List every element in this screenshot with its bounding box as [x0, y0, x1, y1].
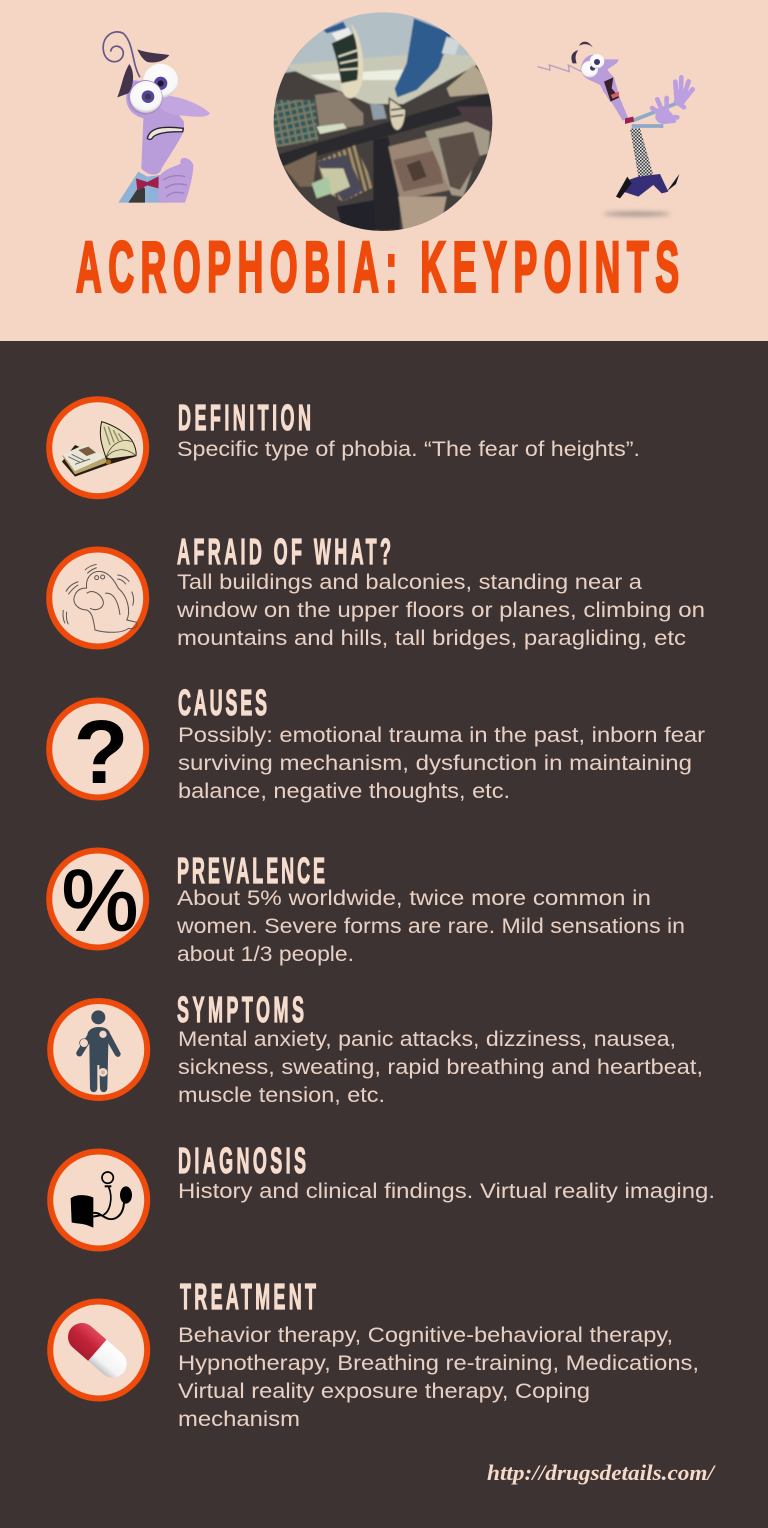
heading: afraid of what: AFRAID OF WHAT? — [177, 532, 391, 573]
icon: capsule pill — [50, 1302, 147, 1398]
icon: open book — [49, 399, 146, 496]
text: symptoms: Mental anxiety, panic attacks, dizziness, nausea, — [178, 1028, 676, 1051]
text: causes: balance, negative thoughts, etc. — [178, 780, 510, 803]
text: symptoms: sickness, sweating, rapid breathing and heartbeat, — [178, 1056, 703, 1079]
text: treatment: Hypnotherapy, Breathing re-training, Medications, — [178, 1352, 699, 1375]
title: ACROPHOBIA: KEYPOINTS — [76, 227, 679, 307]
illustration: fleeing purple character — [537, 42, 693, 216]
photo: looking down from a skyscraper ledge — [270, 7, 497, 237]
heading: symptoms: SYMPTOMS — [177, 990, 304, 1031]
heading: definition: DEFINITION — [178, 398, 311, 439]
text: afraid of what: window on the upper floors or planes, climbing on — [176, 599, 705, 622]
text: treatment: mechanism — [178, 1408, 300, 1431]
section: causes — [49, 683, 705, 803]
section: afraid of what — [49, 532, 705, 650]
icon: question mark — [49, 700, 146, 803]
text: causes: Possibly: emotional trauma in the past, inborn fear — [178, 724, 705, 747]
text: prevalence — [176, 887, 685, 966]
section: diagnosis — [50, 1141, 715, 1248]
icon: question mark: ? — [74, 703, 128, 803]
text: afraid of what: Tall buildings and balconies, standing near a — [177, 571, 642, 594]
text: treatment — [178, 1324, 699, 1431]
panel: header — [0, 0, 768, 341]
heading: treatment: TREATMENT — [180, 1277, 316, 1318]
text: diagnosis: History and clinical findings. Virtual reality imaging. — [178, 1180, 715, 1203]
text: treatment: Virtual reality exposure therapy, Coping — [178, 1380, 590, 1403]
text: treatment: Behavior therapy, Cognitive-behavioral therapy, — [178, 1324, 673, 1347]
text: symptoms: muscle tension, etc. — [178, 1084, 385, 1107]
icon: trembling figure — [49, 550, 146, 646]
text: prevalence: women. Severe forms are rare. Mild sensations in — [176, 915, 685, 938]
panel: keypoints — [0, 341, 768, 1528]
text: prevalence: about 1/3 people. — [177, 943, 354, 966]
text: prevalence: About 5% worldwide, twice more common in — [177, 887, 651, 910]
heading: prevalence: PREVALENCE — [177, 851, 325, 892]
icon: human figure with marked joints — [50, 1001, 147, 1098]
source link text: http://drugsdetails.com/ — [487, 1460, 716, 1485]
heading: diagnosis: DIAGNOSIS — [178, 1141, 306, 1182]
text: causes: surviving mechanism, dysfunction in maintaining — [178, 752, 692, 775]
section: prevalence — [49, 850, 685, 966]
icon: percent sign: % — [62, 853, 138, 949]
text: causes — [178, 724, 705, 803]
text: definition: Specific type of phobia. “The fear of heights”. — [177, 438, 640, 461]
section: treatment — [50, 1277, 699, 1431]
text: symptoms — [178, 1028, 703, 1107]
icon: blood pressure cuff — [50, 1152, 147, 1248]
heading: causes: CAUSES — [178, 683, 267, 724]
text: afraid of what — [176, 571, 705, 650]
section: symptoms — [50, 990, 703, 1107]
section: definition — [49, 398, 640, 496]
illustration: worried purple character — [103, 32, 210, 203]
text: afraid of what: mountains and hills, tall bridges, paragliding, etc — [177, 627, 686, 650]
